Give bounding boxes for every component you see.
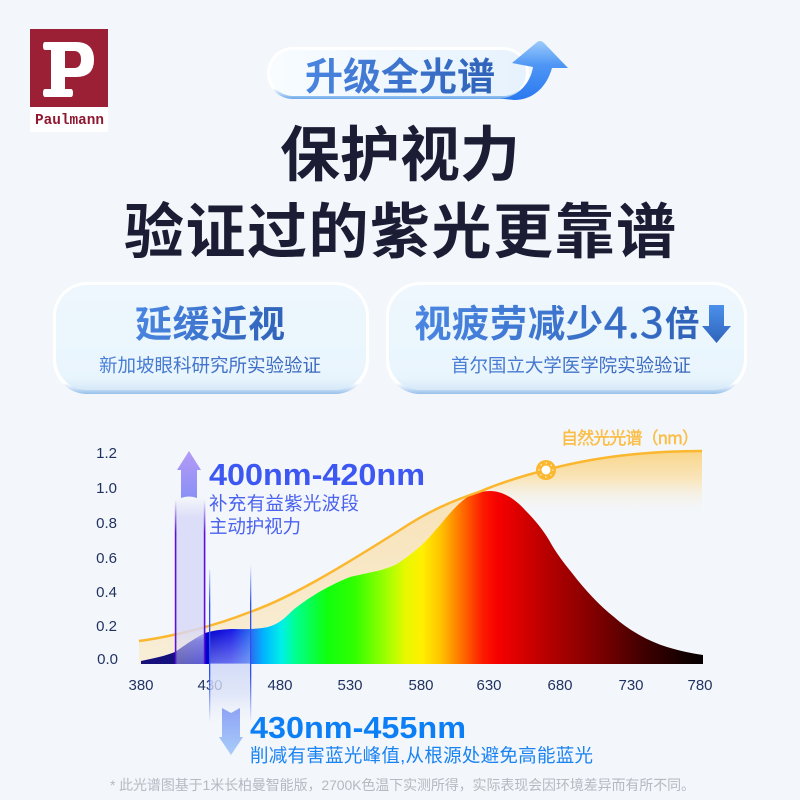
- x axis labels: 630: [476, 677, 502, 694]
- callout: 400-420nm: [209, 458, 425, 537]
- card heading: 4.3: [604, 290, 664, 351]
- x axis labels: 430: [197, 677, 223, 694]
- natural light label: 自然光光谱（nm）: [561, 424, 699, 449]
- card subtext: 新加坡眼科研究所实验验证: [99, 355, 321, 376]
- y axis labels: 0.2: [96, 618, 117, 635]
- y axis labels: 1.0: [96, 480, 117, 497]
- x axis labels: 530: [337, 677, 363, 694]
- card: delayed myopia: [53, 282, 369, 394]
- callout: 430-455nm: 削减有害蓝光峰值,从根源处避免高能蓝光: [250, 745, 593, 766]
- callout: 400-420nm: 400nm-420nm: [209, 458, 425, 492]
- y axis labels: 1.2: [96, 445, 117, 462]
- y axis labels: 0.4: [96, 584, 117, 601]
- badge text: 升级全光谱: [305, 57, 495, 99]
- callout: 430-455nm: [250, 711, 593, 766]
- x axis labels: 580: [408, 677, 434, 694]
- footnote: * 此光谱图基于1米长柏曼智能版，2700K色温下实测所得，实际表现会因环境差异而有所不同。: [110, 777, 695, 793]
- title: 验证过的紫光更靠谱: [124, 199, 676, 266]
- logo: Paulmann: [30, 29, 108, 132]
- logo: Paulmann: Paulmann: [35, 112, 104, 129]
- y axis labels: 0.0: [97, 651, 118, 668]
- band: 430-455nm: [209, 565, 251, 722]
- arrow: up violet: [177, 451, 201, 498]
- card heading: 延缓近视: [135, 304, 285, 345]
- arrow: down blue: [219, 708, 243, 755]
- x axis labels: 780: [687, 677, 713, 694]
- icon: sun marker: [536, 460, 556, 480]
- spectrum area: [141, 491, 703, 664]
- title: [124, 122, 676, 266]
- icon: down arrow: [702, 305, 731, 343]
- y axis labels: [96, 445, 118, 668]
- y axis labels: 0.6: [96, 550, 117, 567]
- natural light curve: [139, 451, 702, 641]
- band: 400-420nm: [175, 498, 205, 664]
- title: 保护视力: [280, 122, 520, 189]
- card heading: 视疲劳减少: [414, 293, 604, 348]
- y axis labels: 0.8: [96, 515, 117, 532]
- callout: 400-420nm: 主动护视力: [209, 516, 301, 537]
- callout: 400-420nm: 补充有益紫光波段: [209, 493, 359, 514]
- card heading: 倍: [665, 296, 700, 346]
- x axis labels: [128, 677, 713, 694]
- badge: upgrade full spectrum: [267, 41, 568, 100]
- x axis labels: 480: [267, 677, 293, 694]
- x axis labels: 680: [547, 677, 573, 694]
- callout: 430-455nm: 430nm-455nm: [250, 711, 466, 745]
- card: eye fatigue: [386, 282, 747, 394]
- card subtext: 首尔国立大学医学院实验验证: [451, 355, 691, 376]
- natural light area: [139, 492, 480, 664]
- badge arrow: [500, 41, 568, 100]
- x axis labels: 380: [128, 677, 154, 694]
- x axis labels: 730: [618, 677, 644, 694]
- chart: light spectrum: [96, 424, 713, 722]
